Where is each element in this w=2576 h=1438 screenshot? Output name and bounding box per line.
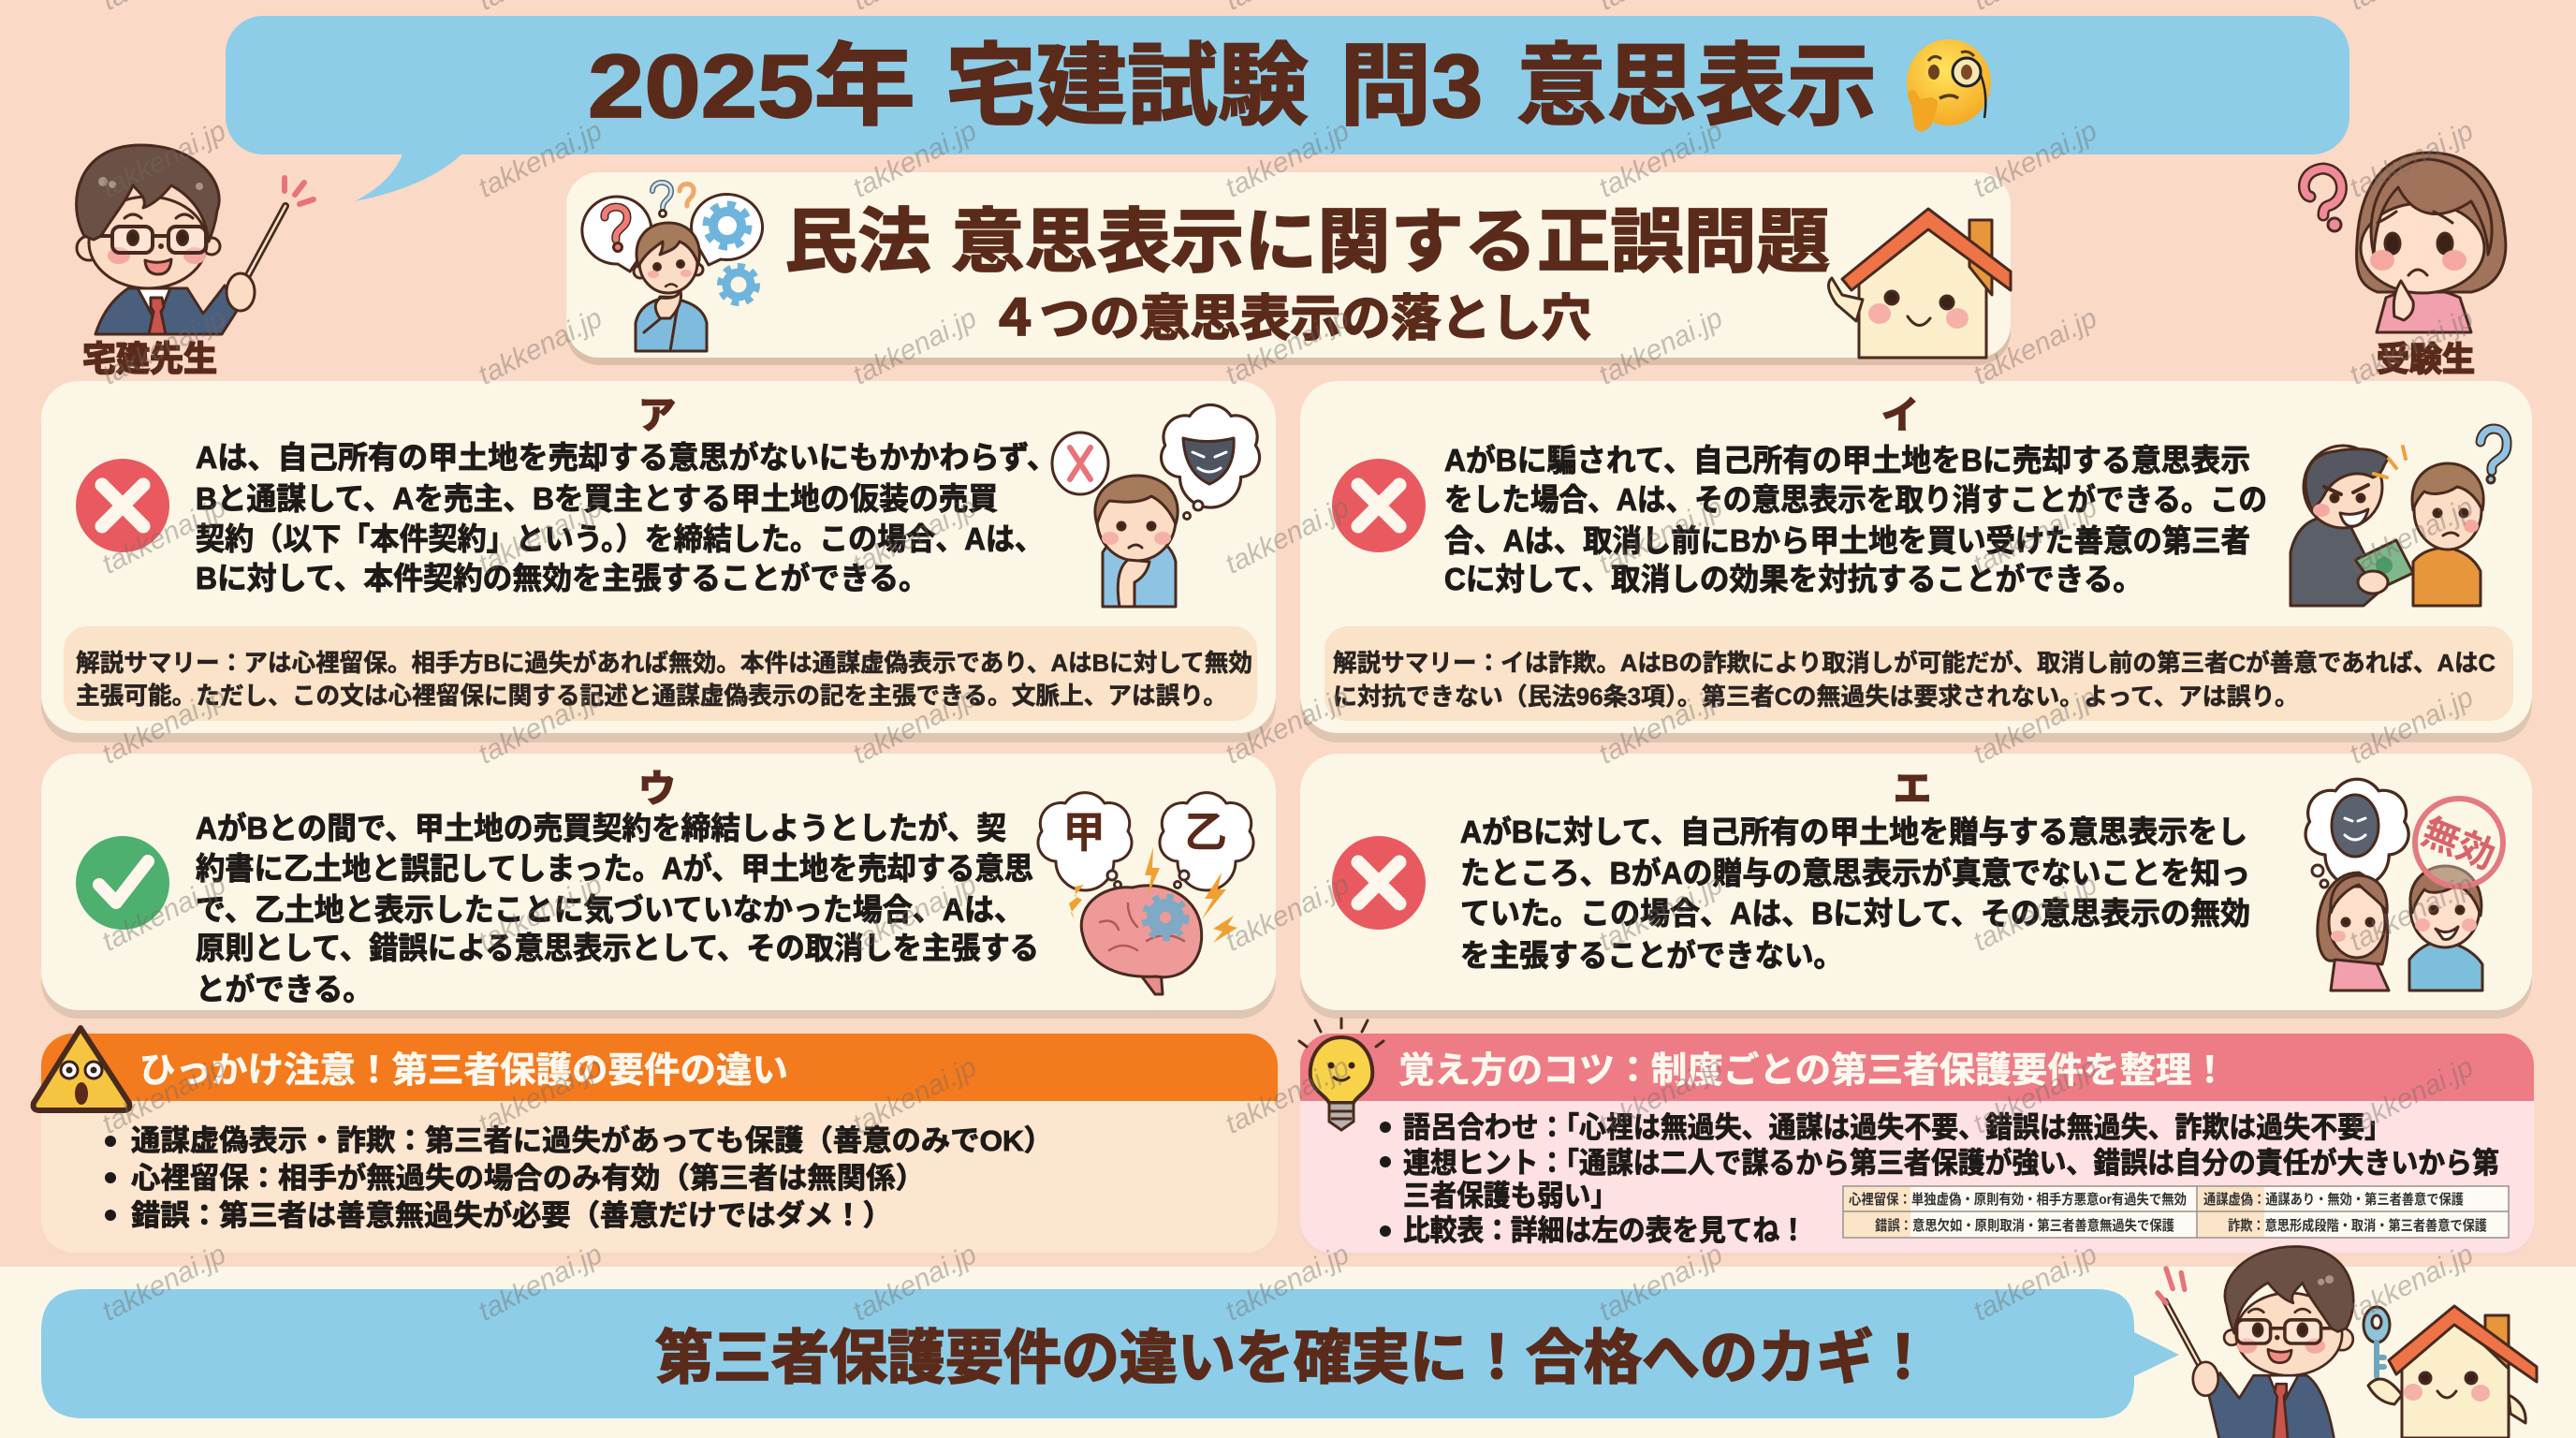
question text イ (1444, 443, 2267, 596)
icon: wrong mark (1332, 459, 1426, 552)
watermarks: takkenai.jp (1969, 492, 2102, 580)
bullet list: memory tips: 三者保護も弱い」 (1403, 1180, 1617, 1212)
watermarks: takkenai.jp (1594, 682, 1728, 770)
icon: smiling light bulb (1299, 1019, 1383, 1130)
icon: wrong mark (76, 459, 169, 552)
question text ウ: AがBとの間で、甲土地の売買契約を締結しようとしたが、契 (196, 811, 1006, 845)
comparison table: 通謀虚偽：通謀あり・無効・第三者善意で保護 (2203, 1191, 2464, 1208)
explanation summary イ: に対抗できない（民法96条3項）。第三者Cの無過失は要求されない。よって、アは誤り。 (1333, 682, 2299, 711)
heading イ: イ (1881, 395, 1919, 436)
question text ア: 契約（以下「本件契約」という。）を締結した。この場合、Aは、 (196, 521, 1044, 556)
bullet list: memory tips: 比較表：詳細は左の表を見てね！ (1403, 1214, 1807, 1247)
question text ア: Aは、自己所有の甲土地を売却する意思がないにもかかわらず、 (196, 440, 1057, 475)
question text イ: 合、Aは、取消し前にBから甲土地を買い受けた善意の第三者 (1444, 523, 2250, 558)
question text ウ: で、乙土地と表示したことに気づいていなかった場合、Aは、 (196, 892, 1024, 927)
label: teacher: 宅建先生 (82, 340, 217, 378)
panel: エ (1300, 754, 2532, 1019)
watermarks: takkenai.jp (474, 1239, 607, 1328)
heading ア: ア (638, 395, 676, 436)
watermarks: takkenai.jp (474, 492, 607, 580)
watermarks: takkenai.jp (474, 1051, 607, 1140)
panel: イ (1300, 381, 2532, 742)
thought character 乙: 乙 (1184, 808, 1227, 857)
question text イ: AがBに騙されて、自己所有の甲土地をBに売却する意思表示 (1444, 443, 2250, 477)
watermarks: takkenai.jp (848, 869, 982, 958)
icon: smiling house (1828, 209, 2011, 358)
watermarks: takkenai.jp (97, 682, 231, 770)
title text: 問3 (1339, 37, 1483, 137)
watermarks: takkenai.jp (2345, 302, 2479, 391)
footer message: 第三者保護要件の違いを確実に！合格へのカギ！ (655, 1326, 1932, 1391)
subtitle heading: 民法 意思表示に関する正誤問題 (784, 202, 1830, 281)
watermarks: takkenai.jp (97, 1051, 231, 1140)
watermarks: takkenai.jp (2345, 682, 2479, 770)
watermarks: takkenai.jp (474, 302, 607, 391)
panel: ア (41, 381, 1276, 742)
label: student: 受験生 (2377, 340, 2475, 378)
watermarks: takkenai.jp (97, 1239, 231, 1328)
bullet list: third party requirements: 錯誤：第三者は善意無過失が必要（善意だけではダメ！） (131, 1199, 892, 1232)
icon: wrong mark (1332, 836, 1426, 930)
explanation summary イ (1325, 626, 2513, 721)
explanation summary ア (64, 626, 1257, 721)
icon: correct mark (76, 836, 169, 930)
question text エ: ていた。この場合、Aは、Bに対して、その意思表示の無効 (1460, 896, 2250, 931)
illustration: brain confusing 甲 and 乙 (1038, 793, 1253, 994)
thought character 甲: 甲 (1062, 808, 1105, 857)
subtitle line 2: ４つの意思表示の落とし穴 (989, 291, 1591, 346)
watermarks: takkenai.jp (1221, 869, 1354, 958)
question text ウ: 約書に乙土地と誤記してしまった。Aが、甲土地を売却する意思 (196, 851, 1033, 886)
panel: memory tips (1299, 1019, 2534, 1256)
comparison table: 詐欺：意思形成段階・取消・第三者善意で保護 (2228, 1217, 2487, 1234)
question text ウ: とができる。 (196, 972, 373, 1006)
icon: surprised warning triangle (34, 1028, 129, 1110)
watermarks: takkenai.jp (848, 682, 982, 770)
explanation summary ア: 解説サマリー：アは心裡留保。相手方Bに過失があれば無効。本件は通謀虚偽表示であり、AはBに対して無効 (76, 649, 1252, 677)
stamp text 無効: 無効 (2416, 811, 2501, 877)
question text ウ (196, 811, 1039, 1006)
question text ア: Bと通謀して、Aを売主、Bを買主とする甲土地の仮装の売買 (196, 481, 998, 516)
title text (588, 37, 1877, 137)
watermarks: takkenai.jp (474, 682, 607, 770)
bullet list: memory tips (1380, 1111, 2499, 1247)
tips heading: 覚え方のコツ：制度ごとの第三者保護要件を整理！ (1398, 1051, 2228, 1091)
watermarks: takkenai.jp (2345, 869, 2479, 958)
watermarks: takkenai.jp (1969, 1239, 2102, 1328)
bullet list: third party requirements: 心裡留保：相手が無過失の場合のみ有効（第三者は無関係） (131, 1162, 925, 1195)
footer speech bubble (41, 1289, 2179, 1418)
character: student (2304, 153, 2506, 332)
title text: 2025年 (588, 37, 915, 137)
watermarks: takkenai.jp (848, 115, 982, 204)
watermarks: takkenai.jp (1221, 492, 1354, 580)
bullet list: memory tips: 連想ヒント：「通謀は二人で謀るから第三者保護が強い、錯誤は自分の責任が大きいから第 (1403, 1147, 2499, 1180)
question text ウ: 原則として、錯誤による意思表示として、その取消しを主張する (196, 931, 1039, 965)
illustration: couple, mask and invalid stamp (2305, 779, 2503, 990)
watermarks: takkenai.jp (848, 1051, 982, 1140)
character: teacher pointing (2158, 1247, 2353, 1438)
question text エ (1460, 814, 2250, 973)
watermarks: takkenai.jp (474, 115, 607, 204)
watermarks: takkenai.jp (474, 869, 607, 958)
watermarks: takkenai.jp (1594, 1051, 1728, 1140)
title text: 宅建試験 (945, 37, 1309, 137)
question text ア: Bに対して、本件契約の無効を主張することができる。 (196, 561, 929, 595)
illustration: deceiver and victim (2291, 429, 2507, 606)
heading ウ: ウ (638, 769, 676, 810)
watermarks: takkenai.jp (97, 302, 231, 391)
watermarks: takkenai.jp (2345, 1239, 2479, 1328)
watermarks: takkenai.jp (848, 1239, 982, 1328)
watermarks: takkenai.jp (848, 492, 982, 580)
panel: subtitle (566, 172, 2011, 365)
watermarks: takkenai.jp (97, 115, 231, 204)
watermarks: takkenai.jp (1594, 1239, 1728, 1328)
question text エ: を主張することができない。 (1460, 938, 1843, 973)
watermarks: takkenai.jp (1969, 302, 2102, 391)
watermarks: takkenai.jp (1221, 302, 1354, 391)
watermarks: takkenai.jp (2345, 492, 2479, 580)
question text イ: をした場合、Aは、その意思表示を取り消すことができる。この (1444, 482, 2267, 517)
panel: ウ (41, 754, 1276, 1019)
question text イ: Cに対して、取消しの効果を対抗することができる。 (1444, 562, 2143, 596)
question text エ: AがBに対して、自己所有の甲土地を贈与する意思表示をし (1460, 814, 2247, 849)
watermarks: takkenai.jp (97, 492, 231, 580)
panel: trap warning (34, 1028, 1278, 1256)
icon: monocle thinking emoji (1907, 39, 1991, 132)
illustration: boy imagining a mask (1052, 404, 1260, 607)
comparison table: 心裡留保：単独虚偽・原則有効・相手方悪意or有過失で無効 (1849, 1191, 2187, 1208)
explanation summary ア: 主張可能。ただし、この文は心裡留保に関する記述と通謀虚偽表示の記を主張できる。文脈上、アは誤り。 (76, 682, 1227, 710)
watermarks: takkenai.jp (1594, 492, 1728, 580)
watermarks: takkenai.jp (1594, 869, 1728, 958)
trap heading: ひっかけ注意！第三者保護の要件の違い (139, 1051, 788, 1091)
watermarks: takkenai.jp (1221, 1239, 1354, 1328)
bullet list: third party requirements: 通謀虚偽表示・詐欺：第三者に過失があっても保護（善意のみでOK） (131, 1124, 1053, 1157)
watermarks: takkenai.jp (1969, 1051, 2102, 1140)
question text エ: たところ、BがAの贈与の意思表示が真意でないことを知っ (1460, 856, 2250, 890)
bullet list: third party requirements (105, 1124, 1053, 1232)
watermarks: takkenai.jp (1594, 115, 1728, 204)
comparison table: 錯誤：意思欠如・原則取消・第三者善意無過失で保護 (1875, 1217, 2174, 1234)
title text: 意思表示 (1516, 37, 1877, 137)
character: teacher (77, 145, 314, 334)
watermarks: takkenai.jp (1221, 115, 1354, 204)
title speech bubble (226, 16, 2349, 201)
character: house holding key (2364, 1306, 2537, 1438)
heading エ: エ (1894, 769, 1931, 810)
watermarks: takkenai.jp (1969, 682, 2102, 770)
watermarks: takkenai.jp (97, 869, 231, 958)
watermarks: takkenai.jp (1594, 302, 1728, 391)
comparison table (1843, 1186, 2509, 1238)
question text ア (196, 440, 1057, 595)
icon: thinking boy with gears (582, 183, 763, 351)
bullet list: memory tips: 語呂合わせ：「心裡は無過失、通謀は過失不要、錯誤は無過失、詐欺は過失不要」 (1403, 1111, 2392, 1144)
watermarks: takkenai.jp (848, 302, 982, 391)
watermarks: takkenai.jp (1221, 1051, 1354, 1140)
watermarks: takkenai.jp (1221, 682, 1354, 770)
explanation summary イ: 解説サマリー：イは詐欺。AはBの詐欺により取消しが可能だが、取消し前の第三者Cが善意であれば、AはC (1333, 649, 2496, 677)
watermarks: takkenai.jp (2345, 1051, 2479, 1140)
watermarks: takkenai.jp (2345, 115, 2479, 204)
watermarks: takkenai.jp (1969, 115, 2102, 204)
watermarks: takkenai.jp (1969, 869, 2102, 958)
